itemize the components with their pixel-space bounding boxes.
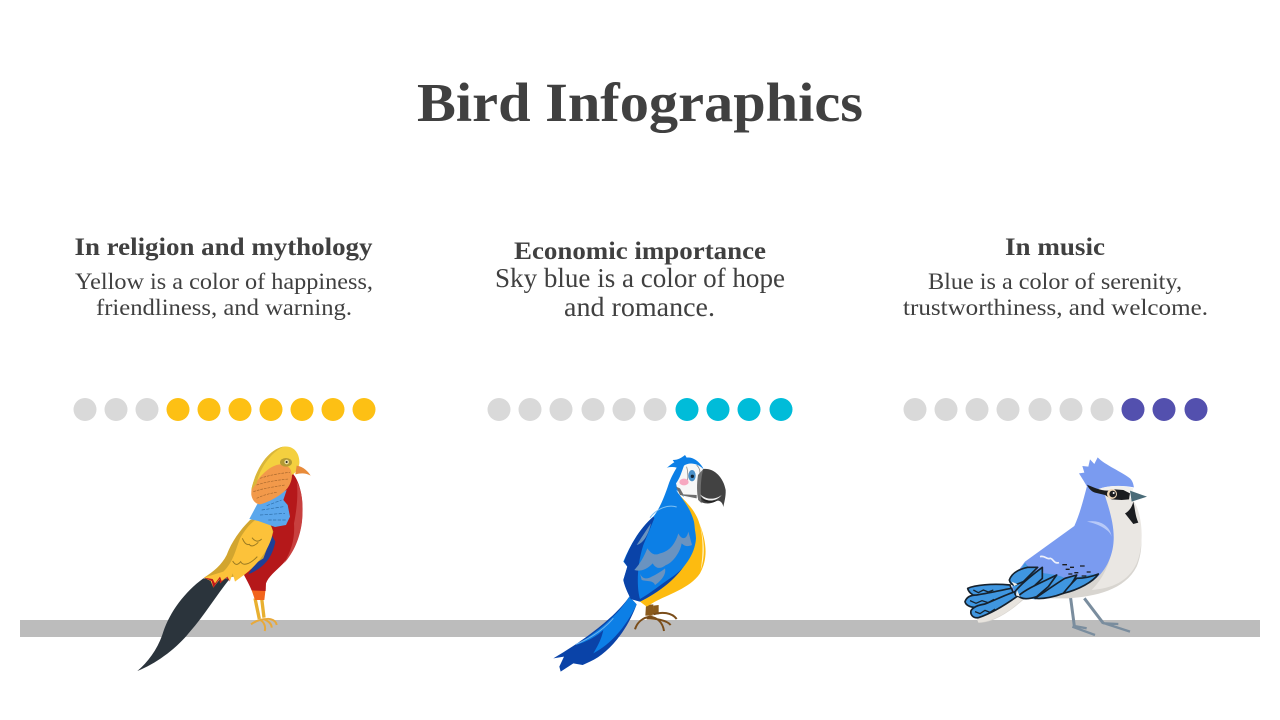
rating dots: 7 of 10 yellow [74,398,376,421]
text block: religion: friendliness, and warning. [96,295,352,321]
panel: religion and mythology [74,234,376,671]
text block: music: Blue is a color of serenity, [928,269,1182,295]
title: Bird Infographics [417,72,863,133]
heading: economic: Economic importance [514,238,766,265]
text block: economic: and romance. [564,292,715,322]
text block: economic [495,263,785,322]
panel: in music [903,234,1208,635]
heading: music: In music [1005,234,1105,261]
perch bar [20,620,1260,637]
text block: music [903,269,1208,321]
panel: economic importance [488,238,792,672]
rating dots: 4 of 10 sky blue [488,398,792,421]
text block: religion [75,269,373,321]
heading: religion: In religion and mythology [74,234,373,261]
icon: golden pheasant [137,446,311,671]
text block: economic: Sky blue is a color of hope [495,263,785,293]
rating dots: 3 of 10 purple [904,398,1208,421]
text block: religion: Yellow is a color of happiness, [75,269,373,295]
icon: blue jay [965,457,1147,635]
text block: music: trustworthiness, and welcome. [903,295,1208,321]
icon: blue and yellow macaw [553,455,726,672]
